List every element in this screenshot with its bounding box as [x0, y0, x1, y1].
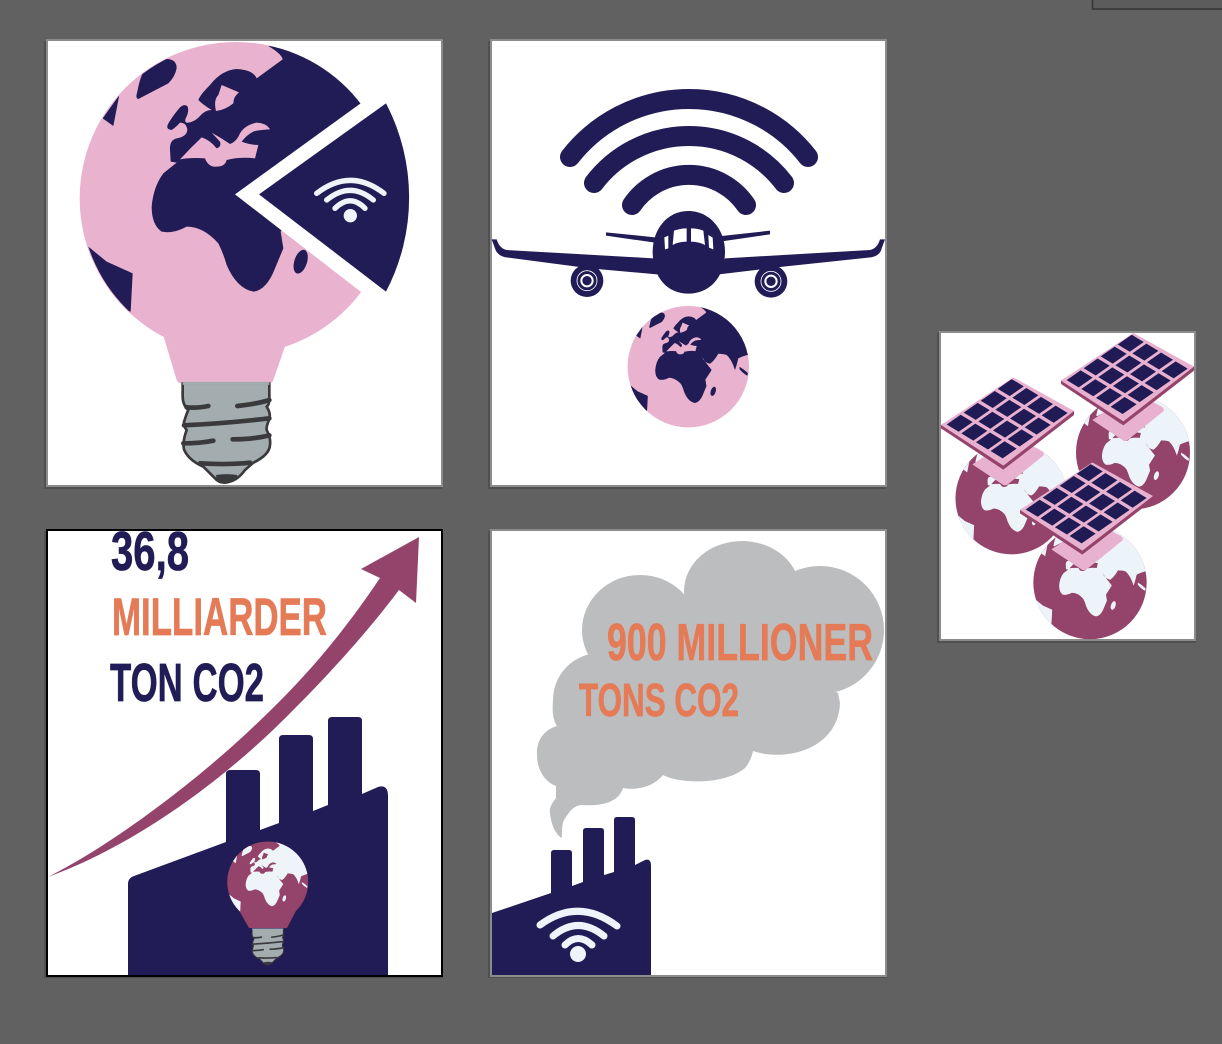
panel: solar panels on globes — [937, 332, 1196, 643]
bulb screw base — [183, 383, 270, 483]
icon: globe — [625, 301, 754, 427]
globe with solar panel 3 — [1020, 462, 1153, 639]
heading: 36,8: 36,8 — [111, 520, 189, 582]
globe with solar panel 2 — [1061, 333, 1195, 510]
panel: 36,8 milliarder ton CO2 — [44, 520, 443, 978]
arrow: rising trend — [48, 537, 419, 877]
icon: wifi arcs — [570, 99, 808, 205]
heading: tons CO2: TONS CO2 — [579, 674, 739, 726]
icon: factory with wifi — [492, 817, 651, 975]
heading: ton CO2: TON CO2 — [110, 653, 264, 713]
heading: 900 millioner: 900 MILLIONER — [607, 614, 873, 672]
icon: small light bulb globe — [225, 838, 312, 965]
panel: 900 millioner tons CO2 — [488, 530, 887, 978]
globe with solar panel 1 — [941, 377, 1074, 554]
corner window fragment — [1092, 0, 1222, 9]
bulb illustration — [73, 30, 423, 483]
panel: airplane with wifi and globe — [488, 40, 886, 489]
icon: factory — [128, 717, 388, 975]
icon: airplane — [492, 211, 885, 298]
wifi wedge — [259, 103, 409, 292]
heading: milliarder: MILLIARDER — [112, 588, 327, 647]
panel: light bulb globe with wifi wedge — [44, 30, 442, 489]
smoke cloud — [537, 541, 884, 838]
